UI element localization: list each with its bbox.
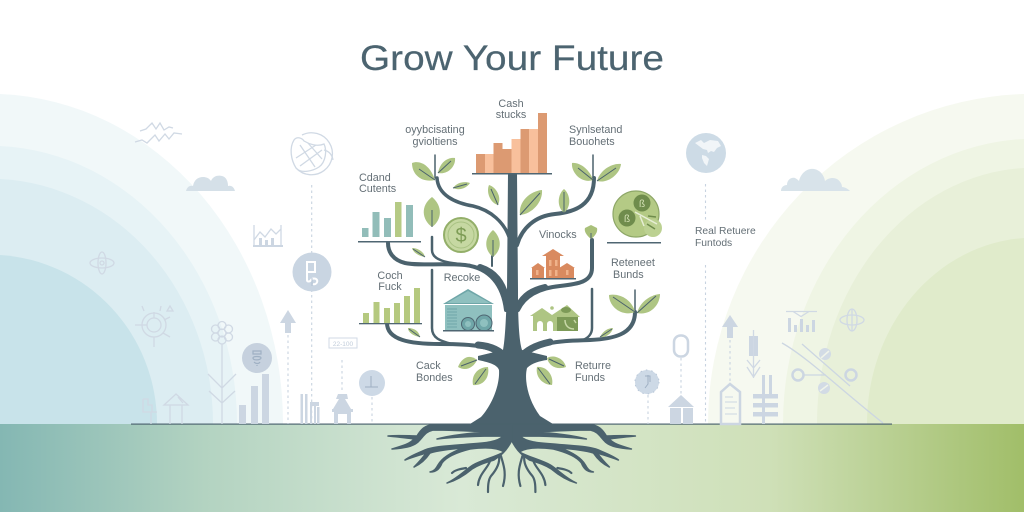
icon: stacked figure [332,394,353,424]
bar chart: orange top [472,113,552,174]
label: reteneet bunds: Bunds [613,269,644,281]
icon: line chart [253,225,283,247]
icon: green coins cluster [607,191,662,244]
title: Grow Your Future [360,39,664,78]
bar chart: teal left [358,202,421,242]
icon: circle badge with bars [242,343,272,373]
label: synlsetand bouohets: Synlsetand [569,124,622,136]
roots right [511,424,635,492]
icon: arrow up right [722,315,738,382]
icon: turtle globe [291,133,333,175]
label: synlsetand bouohets: Bouohets [569,136,615,148]
icon: green coins cluster: ß [639,199,645,210]
ground band [0,424,1024,512]
label: cash stucks: stucks [496,109,527,121]
icon: pill ring [674,336,688,356]
leaves [408,158,660,385]
icon: stacked horizontal bars [753,375,778,424]
label: real reture funtods: Funtods [695,238,732,249]
roots [388,424,635,492]
icon: cloud left [186,176,235,191]
icon: clock circle right [635,370,659,424]
icon: number box: 22-100 [333,341,353,348]
icon: dollar coin [444,218,478,252]
icon: diagonal lines with circles [782,343,883,423]
icon: dollar coin: $ [455,225,467,247]
icon: small house [164,394,188,424]
icon: chair [143,399,157,424]
icon: clock circle left [359,370,385,424]
label: cdand cutents: Cutents [359,183,397,195]
icon: globe [686,133,726,173]
background arcs: right green [708,94,1024,424]
icon: building bars [300,394,320,424]
label: reteneet bunds: Reteneet [611,257,655,269]
icon: columned house [668,395,694,424]
label: oyybcisating gvioltiens: oyybcisating [405,124,465,136]
label: returre funds: Funds [575,372,606,384]
dotted line: label to base [704,265,706,424]
right faint icons [635,133,883,424]
bar chart: lime left [359,288,422,324]
label: cash stucks: Cash [498,98,524,110]
label: returre funds: Returre [575,360,611,372]
label: cack bondes: Cack [416,360,441,372]
tree [387,155,660,492]
dotted line: pill to house [680,358,682,394]
dotted line: turtle to base [311,185,313,424]
roots left [388,424,512,492]
dotted line: box to figure [341,360,343,392]
icon: compass flower right [840,309,864,331]
icon: circle with letter [292,252,332,292]
label: oyybcisating gvioltiens: gvioltiens [412,136,458,148]
icon: document tag [721,384,740,424]
icon: flower plant [208,322,236,424]
label: coch fuck: Coch [377,270,403,282]
icon: orange building [530,249,576,280]
tree branches [387,155,635,360]
icon: sun wheel [135,306,173,347]
label: recoke: Recoke [444,272,480,284]
tree trunk [470,173,553,424]
icon: teal barn with wheels [443,289,494,332]
icon: candle with down arrow [747,330,760,378]
left faint icons [90,123,385,424]
label: cdand cutents: Cdand [359,172,391,184]
icon: compass flower left [90,252,114,274]
label: real reture funtods: Real Retuere [695,226,756,237]
icon: green house [530,305,580,331]
label: vinocks: Vinocks [539,229,577,241]
icon: bars [239,374,269,424]
ground line [131,424,892,425]
icon: arrow up [280,310,296,424]
icon: bar chart with bracket [786,312,817,332]
icon: small leaf Vinocks [585,225,597,239]
label: coch fuck: Fuck [378,281,402,293]
icon: cloud right [781,169,850,191]
background arcs: left blue [0,94,283,424]
icon: green coins cluster: ß [624,214,630,225]
icon: squiggle [135,123,182,143]
icon: number box [329,338,357,348]
label: cack bondes: Bondes [416,372,453,384]
dotted line: globe to label [704,184,706,222]
